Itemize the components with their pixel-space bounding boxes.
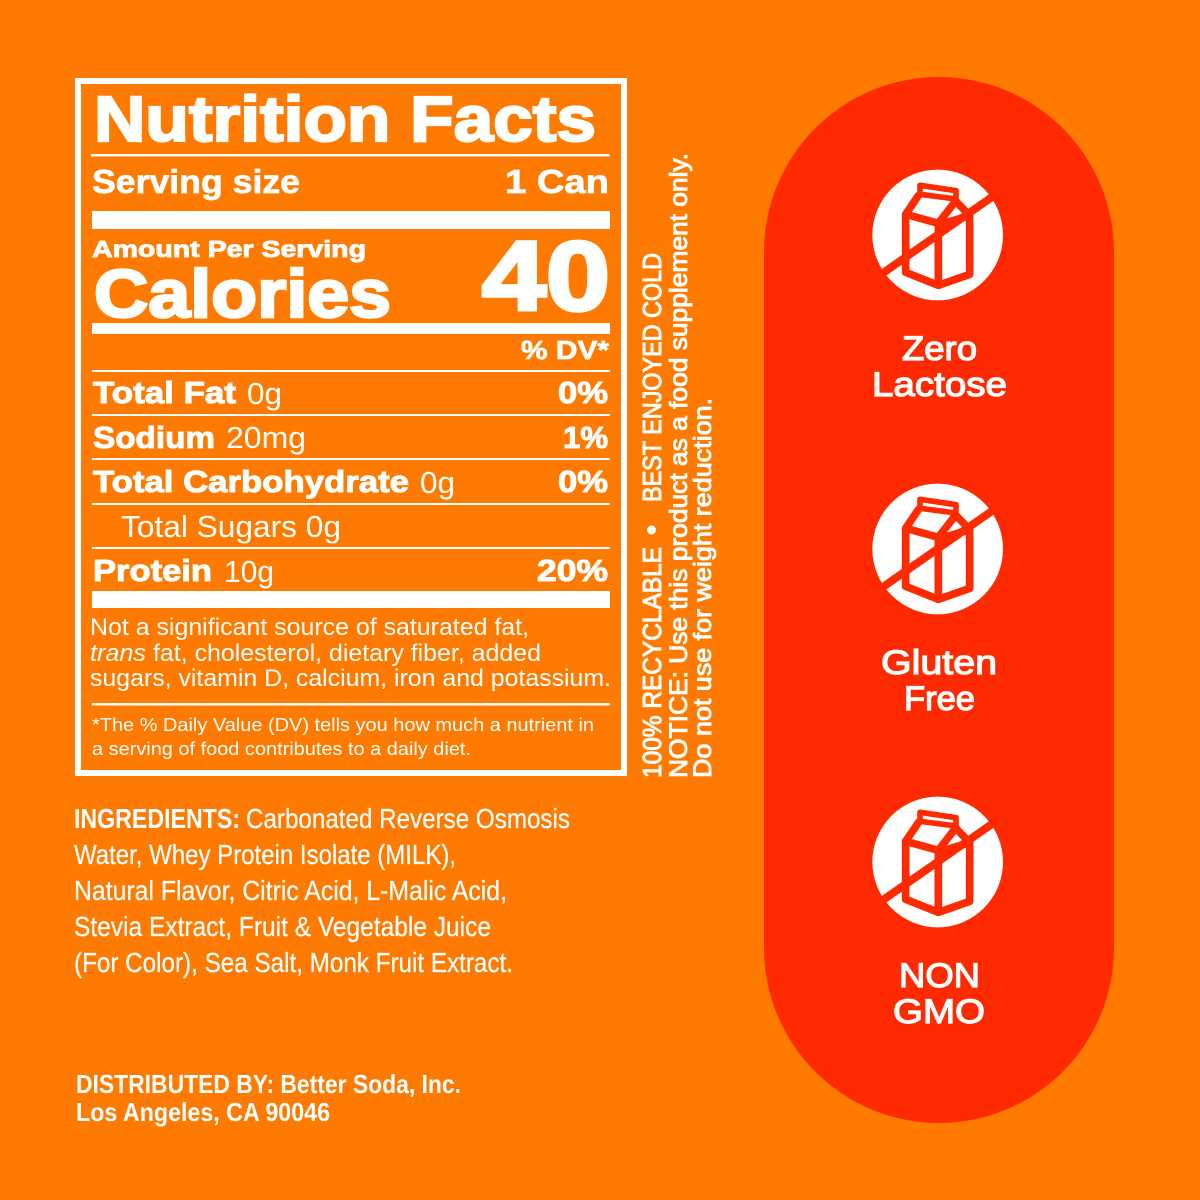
footnote: daily value: a serving of food contributes to a daily diet.: [92, 738, 471, 759]
row: total sugars: Total Sugars 0g: [121, 509, 341, 544]
vertical side text: Do not use for weight reduction.: [689, 398, 717, 778]
ingredients text: Natural Flavor, Citric Acid, L-Malic Acid,: [74, 875, 507, 906]
serving size row: 1 Can: [505, 163, 609, 200]
row: total carbohydrate: 0g: [420, 465, 455, 500]
vertical side text: 100% RECYCLABLE: [639, 547, 667, 778]
row: total carbohydrate: Total Carbohydrate: [93, 464, 409, 499]
icon: no milk carton, zero lactose: [872, 170, 1003, 300]
row: total carbohydrate: 0%: [558, 464, 608, 499]
calories block: [92, 221, 610, 332]
ingredients text: (For Color), Sea Salt, Monk Fruit Extract.: [74, 947, 513, 978]
row: sodium: 20mg: [226, 420, 306, 455]
note: not a significant source: trans: [90, 640, 146, 667]
row: protein: 20%: [537, 553, 608, 588]
label: zero lactose: Lactose: [872, 366, 1007, 404]
row: total fat: 0%: [558, 375, 608, 410]
row: total fat: Total Fat: [93, 375, 236, 410]
vertical side text: [639, 153, 717, 778]
footnote: daily value: [92, 714, 594, 759]
serving size row: [92, 163, 609, 200]
row: sodium: 1%: [563, 420, 608, 455]
label: non gmo: [893, 957, 985, 1031]
ingredients text: [74, 803, 570, 978]
vertical side text: BEST ENJOYED COLD: [639, 253, 667, 502]
calories block: Amount Per Serving: [92, 236, 366, 262]
daily value header: % DV*: [521, 337, 609, 365]
row: protein: Protein: [93, 553, 212, 588]
panel: claims pill: [764, 77, 1114, 1123]
note: not a significant source: sugars, vitamin D, calcium, iron and potassium.: [90, 665, 611, 692]
row: sodium: [93, 420, 608, 455]
calories block: 40: [482, 221, 610, 331]
ingredients text: INGREDIENTS:: [74, 803, 240, 834]
calories block: Calories: [94, 256, 391, 332]
label: non gmo: NON: [899, 957, 980, 995]
icon: no milk carton, gluten free: [872, 484, 1003, 614]
label: zero lactose: Zero: [902, 330, 977, 368]
ingredients text: Stevia Extract, Fruit & Vegetable Juice: [74, 911, 491, 942]
row: total fat: [93, 375, 608, 411]
row: total carbohydrate: [93, 464, 608, 500]
row: total fat: 0g: [247, 376, 282, 411]
heading: Nutrition Facts: Nutrition Facts: [94, 83, 596, 155]
serving size row: Serving size: [92, 163, 300, 200]
distributor text: DISTRIBUTED BY: Better Soda, Inc.: [76, 1069, 461, 1099]
icon: no milk carton, non gmo: [872, 797, 1003, 927]
label: zero lactose: [872, 330, 1007, 404]
note: not a significant source: [90, 614, 611, 692]
footnote: daily value: *The % Daily Value (DV) tells you how much a nutrient in: [92, 714, 594, 735]
ingredients text: Carbonated Reverse Osmosis: [246, 803, 570, 834]
note: not a significant source: fat, cholesterol, dietary fiber, added: [153, 640, 541, 667]
label: gluten free: [881, 644, 997, 718]
label: gluten free: Free: [904, 680, 975, 718]
row: protein: 10g: [224, 554, 274, 589]
label: non gmo: GMO: [893, 993, 985, 1031]
note: not a significant source: Not a significant source of saturated fat,: [90, 614, 529, 641]
ingredients text: Water, Whey Protein Isolate (MILK),: [74, 839, 456, 870]
distributor text: Los Angeles, CA 90046: [76, 1097, 330, 1127]
panel: nutrition facts label: [78, 81, 624, 773]
label: gluten free: Gluten: [881, 644, 997, 682]
row: sodium: Sodium: [93, 420, 215, 455]
vertical side text: NOTICE: Use this product as a food supplement only.: [665, 153, 693, 778]
distributor text: [76, 1069, 461, 1127]
row: protein: [93, 553, 608, 589]
